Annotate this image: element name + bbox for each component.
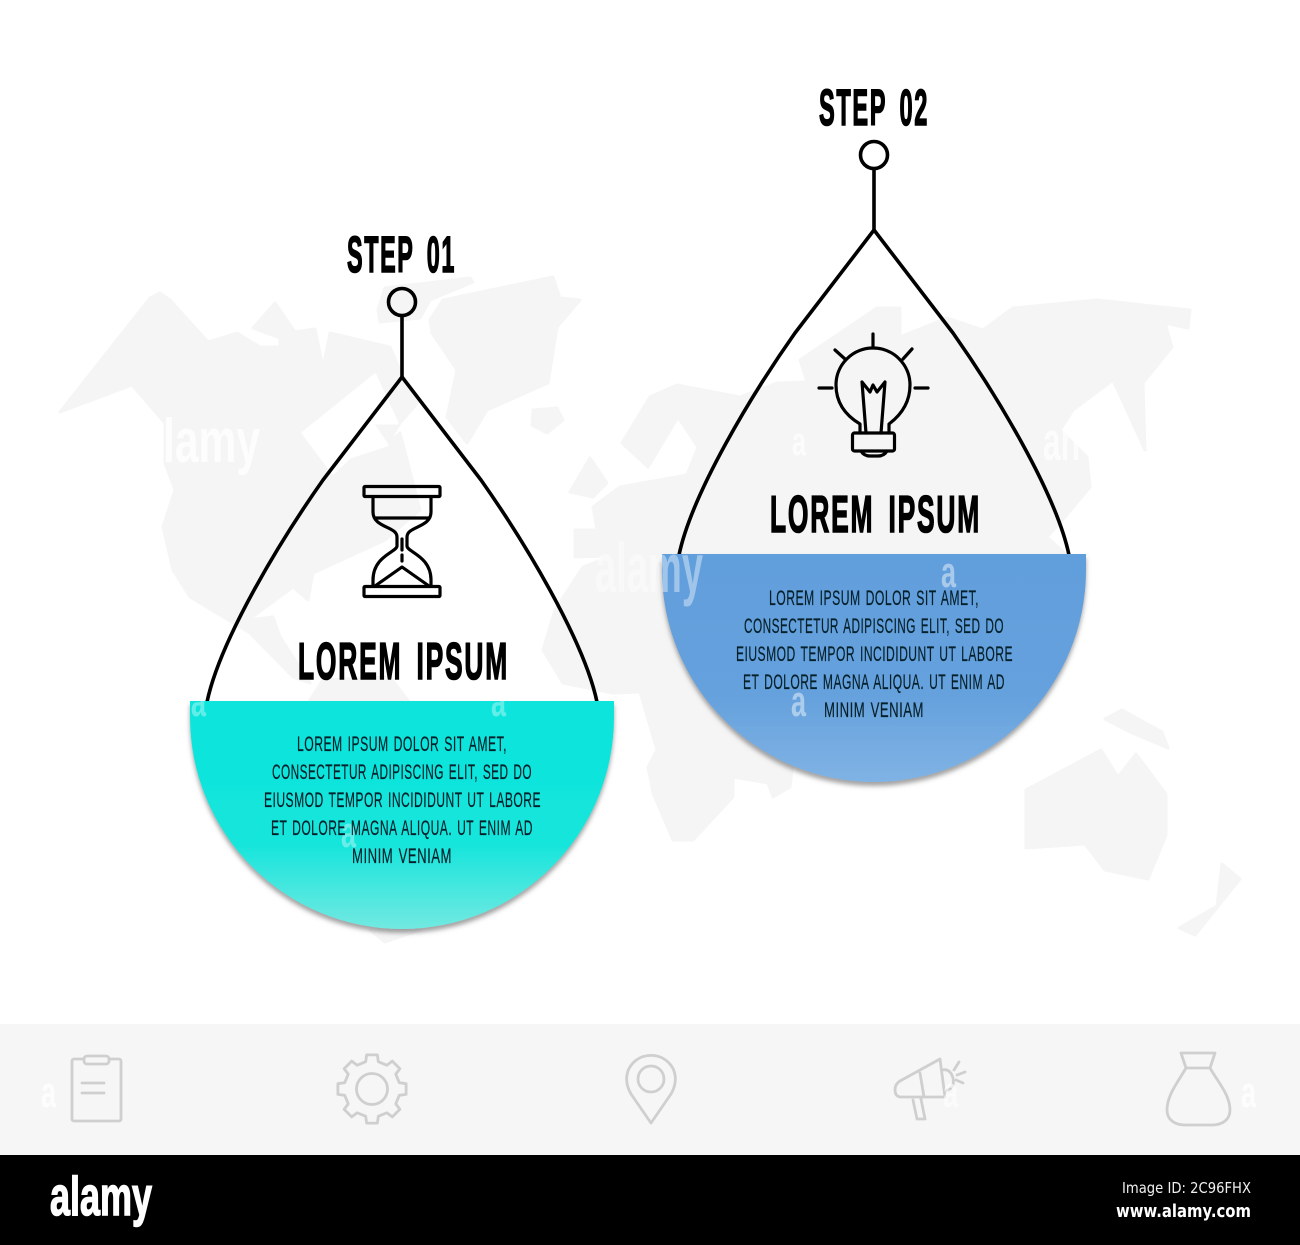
step 02 panel watermarks: a [941, 548, 956, 597]
icon: sack [1167, 1053, 1230, 1125]
website: www.alamy.com [1116, 1202, 1251, 1222]
footer bar [0, 1155, 1300, 1245]
step 02 blue panel [662, 554, 1086, 782]
step 02 body text: EIUSMOD TEMPOR INCIDIDUNT UT LABORE [736, 643, 1013, 666]
step 01 body text: LOREM IPSUM DOLOR SIT AMET, [297, 733, 507, 756]
strip watermarks: a [1241, 1068, 1256, 1117]
step 02 body text: MINIM VENIAM [824, 699, 924, 722]
icon: hourglass [364, 486, 440, 596]
background watermarks [163, 407, 1080, 476]
step 01: STEP 01 [347, 226, 456, 283]
step 02 panel watermarks [595, 529, 956, 726]
step 01 drop outline [207, 377, 597, 702]
step 01 body text: ET DOLORE MAGNA ALIQUA. UT ENIM AD [271, 817, 533, 840]
icon: megaphone [895, 1059, 965, 1119]
step 02 pin [860, 142, 888, 230]
step 01 panel watermarks: a [491, 677, 506, 726]
step 01 body text: EIUSMOD TEMPOR INCIDIDUNT UT LABORE [264, 789, 541, 812]
step 02 [595, 79, 1086, 782]
step 01 heading: LOREM IPSUM [298, 633, 509, 691]
step 02: STEP 02 [819, 79, 929, 136]
step 02 body text: CONSECTETUR ADIPISCING ELIT, SED DO [744, 615, 1004, 638]
step 01 body text: CONSECTETUR ADIPISCING ELIT, SED DO [272, 761, 532, 784]
step 02 panel watermarks: a [791, 677, 806, 726]
step 01 body text: MINIM VENIAM [352, 845, 452, 868]
background world map [60, 277, 1240, 942]
step 02 drop outline [679, 230, 1069, 555]
step 01 panel watermarks: a [341, 808, 356, 857]
step 01 teal panel [190, 701, 614, 929]
step 02 body text: LOREM IPSUM DOLOR SIT AMET, [769, 587, 979, 610]
step 02 body text: ET DOLORE MAGNA ALIQUA. UT ENIM AD [743, 671, 1005, 694]
step 01 panel watermarks: a [191, 677, 206, 726]
step 02 panel watermarks: alamy [595, 529, 703, 607]
icon: map pin [627, 1055, 675, 1123]
icon: gear [338, 1055, 406, 1123]
background watermarks: lamy [163, 407, 260, 476]
image id: Image ID: 2C96FHX [1122, 1179, 1251, 1197]
icon: light bulb [819, 334, 928, 456]
icon: clipboard [72, 1056, 121, 1121]
strip watermarks: a [943, 1068, 958, 1117]
step 02 body text [736, 587, 1013, 722]
step 01 pin [388, 288, 416, 377]
step 01 body text [264, 733, 541, 868]
background watermarks: an [1043, 410, 1080, 472]
icon strip panel [0, 1024, 1300, 1155]
step 01 panel watermarks [191, 677, 506, 857]
strip watermarks: a [41, 1068, 56, 1117]
footer logo: alamy [50, 1165, 152, 1227]
strip watermarks [41, 1068, 1256, 1117]
step 01 [190, 226, 614, 929]
step 02 heading: LOREM IPSUM [770, 486, 981, 544]
background watermarks: a [792, 420, 806, 464]
